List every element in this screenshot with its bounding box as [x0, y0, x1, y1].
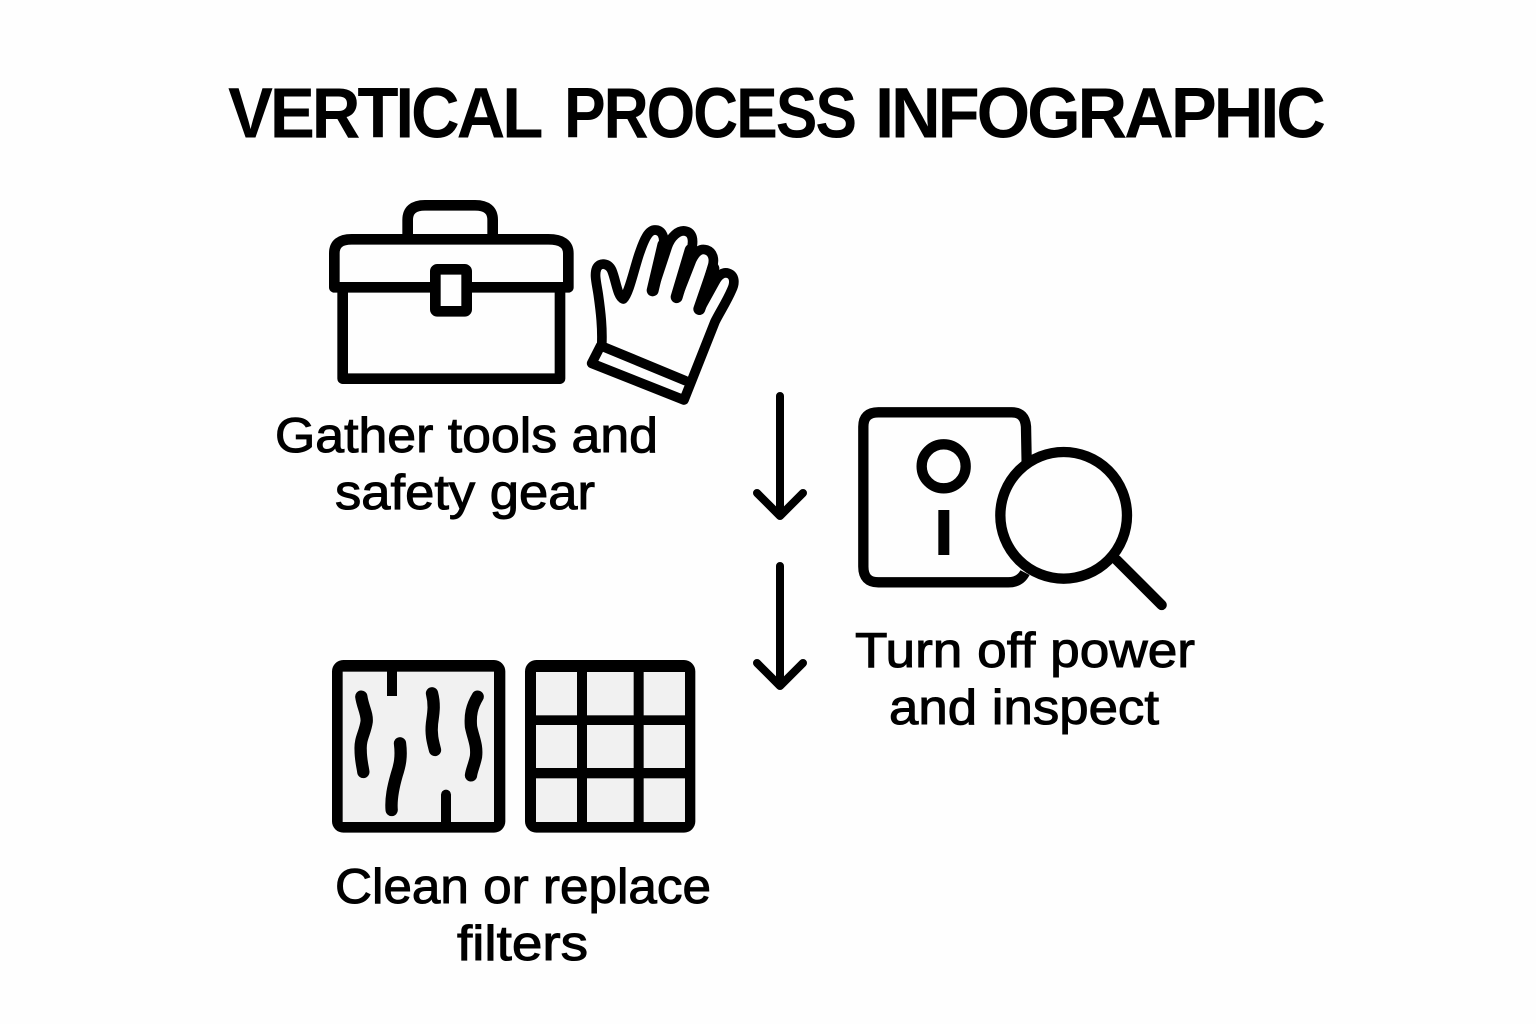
- icon: clean filter grid: [525, 660, 695, 833]
- label: clean or replace filters: [335, 860, 711, 971]
- arrow: step 1 to step 2: [757, 396, 803, 516]
- icon: dirty filter: [332, 660, 505, 833]
- step 2: turn off power and inspect: [855, 412, 1195, 735]
- label: gather tools and safety gear: Gather tools and: [275, 409, 658, 463]
- label: gather tools and safety gear: safety gear: [335, 466, 595, 520]
- title: PROCESS: [564, 74, 857, 153]
- arrow: step 2 to step 3: [757, 566, 803, 686]
- label: turn off power and inspect: [855, 624, 1195, 735]
- label: turn off power and inspect: and inspect: [889, 681, 1159, 735]
- title: INFOGRAPHIC: [875, 74, 1326, 153]
- icon: glove: [592, 230, 734, 400]
- label: clean or replace filters: filters: [457, 917, 588, 971]
- title: VERTICAL: [228, 73, 543, 153]
- label: clean or replace filters: Clean or replace: [335, 860, 711, 914]
- step 3: clean or replace filters: [332, 660, 711, 971]
- icon: toolbox: [334, 205, 568, 379]
- icon: power switch with magnifying glass: [863, 412, 1162, 605]
- label: gather tools and safety gear: [275, 409, 658, 520]
- title: [228, 73, 1326, 153]
- label: turn off power and inspect: Turn off power: [855, 624, 1195, 678]
- step 1: gather tools and safety gear: [275, 205, 734, 520]
